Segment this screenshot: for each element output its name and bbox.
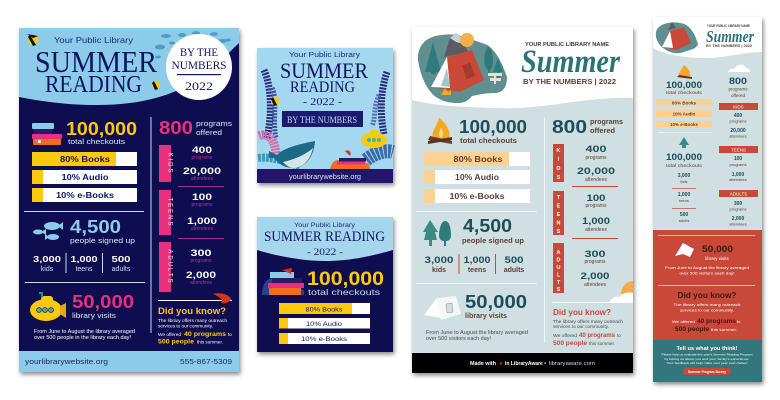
banner stat: signups: 500 — [680, 212, 688, 218]
banner kids: 20,000 — [730, 128, 746, 134]
did you know — [158, 306, 232, 346]
square footer: yourlibrarywebsite.org — [289, 174, 361, 181]
banner adults: programs — [730, 206, 746, 212]
adults stats: 300 — [190, 248, 212, 258]
checkouts stat — [307, 269, 384, 297]
banner visits caption: library visits — [705, 256, 729, 261]
banner stat: signups: teens — [679, 198, 689, 203]
icon: fish — [33, 222, 63, 240]
banner teal section: Summer Program Survey — [688, 370, 726, 374]
camping did you know: The library offers many outreach — [553, 319, 624, 324]
camping did you know: to — [617, 333, 621, 338]
camping breakdown — [424, 254, 524, 274]
camping visits note: over 500 visitors each day! — [426, 336, 491, 342]
banner background — [653, 17, 762, 382]
label: kids: K — [557, 148, 561, 154]
banner stat: signups: 3,000 — [678, 173, 690, 179]
icon: yellow fish lower — [152, 81, 160, 90]
icon: stack of books — [32, 123, 62, 145]
camping library name: YOUR PUBLIC LIBRARY NAME — [525, 42, 609, 48]
stat: visits: 50,000 — [72, 292, 134, 312]
by the numbers box: BY THE NUMBERS — [287, 116, 357, 126]
panel: checkouts square — [257, 217, 393, 352]
banner adults: 300 — [734, 201, 742, 207]
banner teal section: by letting us about you and your family's experience. — [664, 357, 750, 361]
banner bars: 80% Books — [672, 100, 696, 106]
teens stats — [187, 192, 217, 232]
camping teens stats: 1,000 — [582, 216, 610, 226]
teens stats: 1,000 — [187, 216, 217, 226]
label: adults: A — [557, 250, 561, 256]
label: kids: I — [558, 157, 560, 163]
icon: books — [330, 150, 370, 169]
label: teens: TEENS — [166, 197, 172, 228]
banner stat: checkouts: total checkouts — [666, 90, 703, 95]
stat: sign ups: 4,500 — [70, 217, 121, 237]
did you know: services to our community. — [158, 324, 213, 328]
bar: audio: 10% Audio — [306, 321, 342, 328]
camping teens stats: programs — [585, 203, 607, 209]
stat: sign ups — [70, 217, 135, 245]
banner stat: programs: programs — [728, 86, 748, 92]
icon: small fish — [271, 96, 279, 106]
banner visits stat: 50,000 — [702, 244, 733, 254]
checkouts background — [257, 217, 393, 352]
visits note: over 500 people in the library each day! — [34, 335, 131, 341]
banner bars: 10% e-Books — [670, 122, 699, 127]
banner did you know: this summer. — [711, 327, 737, 332]
label: kids — [159, 145, 172, 182]
icon: campfire — [677, 65, 692, 79]
checkouts stat: 100,000 — [307, 269, 384, 290]
camping background — [412, 27, 633, 373]
kids stats — [183, 145, 221, 182]
camping footer: libraryaware.com — [549, 361, 595, 367]
label: adults: U — [557, 265, 561, 271]
poster footer: yourlibrarywebsite.org — [25, 357, 108, 366]
banner did you know: The library offers many outreach — [674, 302, 740, 307]
panel: blue poster — [19, 28, 239, 372]
square title: summer: SUMMER — [280, 58, 368, 83]
icon: cloud — [728, 65, 750, 72]
camping stat: checkouts: total checkouts — [460, 138, 517, 145]
camping breakdown: 3,000 — [424, 255, 454, 265]
bar: e-books — [424, 189, 530, 203]
camping footer — [412, 353, 633, 373]
banner did you know: 500 people — [675, 327, 710, 333]
illustration: small tent scene — [656, 22, 698, 53]
camping title: Summer — [521, 44, 621, 80]
banner kids: programs — [730, 118, 746, 124]
label: teens — [553, 191, 564, 235]
camping stat: sign ups: people signed up — [462, 238, 524, 245]
camping adults stats — [580, 249, 610, 288]
teens stats: 100 — [192, 192, 212, 202]
bar: audio — [424, 170, 530, 184]
bar: e-books — [32, 188, 137, 202]
banner visits note — [665, 265, 749, 276]
bar: e-books: 10% e-Books — [301, 336, 348, 343]
camping breakdown: kids — [432, 267, 446, 274]
banner did you know: We offered — [672, 319, 695, 324]
visits note: From June to August the library averaged — [34, 329, 135, 335]
camping teens stats — [582, 193, 610, 233]
label: adults: T — [557, 280, 561, 286]
adults stats: attendees — [190, 280, 212, 286]
bar: e-books: 10% e-Books — [56, 191, 115, 200]
camping stat: checkouts: 100,000 — [459, 117, 527, 137]
poster footer — [19, 351, 239, 372]
title: reading: READING — [45, 72, 142, 98]
icon: sun and cloud — [610, 281, 633, 302]
kids stats: attendees — [191, 176, 213, 182]
breakdown: kids teens adults: adults — [112, 266, 131, 273]
banner kids: KIDS — [733, 104, 744, 110]
did you know: 500 people — [158, 338, 194, 346]
label: teens: S — [557, 229, 561, 235]
square background — [257, 48, 393, 183]
banner stat: signups: adults — [679, 218, 689, 223]
banner stat: signups: total checkouts — [666, 163, 703, 168]
banner kids: attendees — [729, 134, 747, 138]
kids stats: programs — [191, 155, 213, 161]
camping footer: Made with — [470, 361, 496, 367]
bar: audio: 10% Audio — [62, 173, 109, 182]
panel: camping poster — [412, 27, 633, 373]
camping did you know: 40 programs — [579, 333, 616, 339]
label: adults — [553, 243, 564, 293]
camping did you know: Did you know? — [553, 308, 611, 317]
badge: by the numbers: NUMBERS — [172, 58, 226, 72]
camping footer: ♥ — [499, 362, 503, 368]
illustration: tent scene — [418, 33, 507, 103]
camping stat: visits: library visits — [465, 313, 507, 320]
breakdown: kids teens adults: 3,000 — [33, 254, 61, 264]
label: adults: S — [557, 287, 561, 293]
breakdown: kids teens adults: kids — [41, 266, 54, 273]
stat: checkouts — [66, 119, 137, 146]
breakdown: kids teens adults — [33, 253, 131, 273]
icon: book tent — [675, 243, 694, 257]
banner visits note: over 500 visitors each day! — [680, 270, 734, 276]
adults stats — [186, 248, 216, 286]
camping stat: sign ups: 4,500 — [463, 216, 512, 236]
banner stat: checkouts: 100,000 — [666, 80, 702, 90]
camping kids stats: attendees — [585, 177, 607, 183]
icon: book tent — [424, 296, 461, 320]
banner subtitle: BY THE NUMBERS | 2022 — [706, 44, 752, 48]
camping breakdown: teens — [468, 267, 486, 274]
poster background — [19, 28, 239, 372]
banner teal section — [653, 340, 762, 382]
camping breakdown: 1,000 — [464, 255, 490, 265]
bar: books: 80% Books — [454, 155, 503, 164]
banner teal section: Please help us evaluate this year's Summer Reading Program — [662, 352, 753, 356]
camping kids stats: programs — [585, 155, 607, 161]
banner kids: 400 — [734, 113, 742, 119]
banner bars: 10% Audio — [673, 112, 696, 116]
banner did you know: services to our community. — [680, 308, 734, 312]
kids stats: 20,000 — [183, 166, 221, 176]
label: adults — [159, 242, 172, 292]
camping breakdown: 500 — [504, 255, 524, 265]
did you know: to — [228, 332, 232, 337]
camping did you know: We offered — [553, 333, 578, 338]
banner library name: YOUR PUBLIC LIBRARY NAME — [707, 24, 751, 28]
bar: audio — [32, 170, 137, 184]
stat: visits: library visits — [72, 313, 117, 320]
camping visits note: From June to August the library averaged — [426, 330, 528, 336]
stat: programs offered: programs — [196, 121, 233, 128]
camping adults stats: attendees — [584, 282, 606, 288]
label: kids — [553, 144, 564, 182]
school of fish — [155, 31, 231, 58]
header wave — [19, 28, 239, 105]
banner did you know: Did you know? — [678, 291, 737, 300]
banner stat: programs: 800 — [729, 76, 747, 86]
stat: checkouts: 100,000 — [66, 119, 137, 139]
bar: books — [424, 152, 530, 166]
checkouts header — [257, 217, 393, 261]
square title: reading: READING — [290, 79, 355, 96]
banner stat: signups — [666, 152, 703, 223]
label: kids: D — [557, 166, 561, 172]
breakdown: kids teens adults: teens — [75, 266, 93, 273]
camping header — [412, 27, 633, 108]
camping stat: sign ups — [462, 216, 524, 245]
label: kids: S — [557, 175, 561, 181]
did you know: 40 programs — [184, 331, 226, 338]
adults stats: programs — [190, 258, 212, 264]
camping teens stats: attendees — [585, 227, 607, 233]
banner bars — [656, 99, 712, 128]
label: teens: E — [557, 204, 561, 210]
banner adults: 2,000 — [732, 216, 744, 222]
camping did you know — [553, 308, 624, 347]
camping visits note — [426, 330, 528, 342]
did you know: Did you know? — [158, 306, 226, 316]
stat: visits — [72, 292, 134, 320]
label: adults: L — [557, 272, 561, 278]
banner stat: signups: kids — [680, 179, 688, 184]
banner teens: 100 — [734, 156, 742, 162]
banner did you know: 40 programs — [697, 319, 737, 325]
teens stats: programs — [191, 202, 213, 208]
banner teal section: Tell us what you think! — [676, 346, 738, 352]
icon: trees — [423, 220, 451, 246]
banner kids — [719, 103, 758, 138]
camping kids stats: 400 — [586, 144, 606, 154]
label: teens: N — [557, 220, 561, 226]
coral right — [366, 72, 393, 160]
camping did you know: this summer. — [589, 341, 615, 346]
icon: whale — [269, 141, 315, 168]
bar: e-books: 10% e-Books — [450, 192, 505, 201]
label: adults: ADULTS — [166, 249, 172, 285]
camping stat: programs — [552, 117, 623, 137]
banner did you know — [672, 291, 741, 333]
poster footer: 555-867-5309 — [180, 357, 232, 366]
stat: programs offered — [159, 118, 233, 138]
icon: books — [262, 268, 304, 295]
breakdown: kids teens adults: 1,000 — [70, 254, 98, 264]
banner adults: attendees — [729, 222, 747, 226]
icon: campfire — [428, 118, 452, 144]
stat: sign ups: people signed up — [70, 238, 135, 245]
did you know: We offered — [158, 332, 182, 337]
label: adults: D — [557, 258, 561, 264]
badge: by the numbers — [166, 34, 232, 100]
banner adults — [719, 190, 758, 226]
camping stat: programs: offered — [590, 128, 615, 135]
camping stat: programs: programs — [590, 119, 623, 126]
banner visits note: From June to August the library averaged — [665, 265, 749, 270]
banner title: Summer — [706, 27, 754, 46]
panel: ocean square — [257, 48, 393, 183]
banner stat: signups: 1,000 — [678, 192, 690, 198]
adults stats: 2,000 — [186, 270, 216, 280]
camping did you know: 500 people — [553, 341, 588, 347]
checkouts stat: total checkouts — [308, 288, 380, 297]
icon: submarine — [30, 292, 66, 321]
stat: programs offered: offered — [196, 130, 222, 137]
bar: books: 80% Books — [60, 155, 111, 164]
camping kids stats — [577, 144, 615, 183]
camping stat: visits: 50,000 — [465, 292, 527, 312]
banner teal section: Your feedback will help make next year even better! — [666, 361, 748, 365]
camping adults stats: programs — [584, 259, 606, 265]
bar: audio: 10% Audio — [455, 173, 499, 182]
banner teens: TEENS — [731, 148, 746, 152]
banner teens: 1,000 — [732, 172, 744, 178]
banner red section — [653, 230, 762, 340]
camping kids stats: 20,000 — [577, 166, 615, 176]
banner did you know: to — [737, 319, 741, 324]
teens stats: attendees — [191, 226, 213, 232]
banner teens: programs — [730, 162, 746, 167]
square library name: Your Public Library — [289, 52, 361, 59]
camping teens stats: 100 — [586, 193, 606, 203]
camping breakdown: adults — [504, 267, 524, 274]
visits note — [34, 329, 135, 341]
checkouts title: SUMMER READING — [264, 229, 385, 245]
did you know: this summer. — [197, 340, 223, 344]
banner stat: checkouts — [666, 80, 703, 95]
camping stat: programs: 800 — [552, 117, 587, 137]
banner adults: ADULTS — [730, 192, 747, 196]
stat: checkouts: total checkouts — [68, 139, 126, 146]
camping adults stats: 300 — [584, 249, 606, 259]
banner teens: attendees — [729, 177, 747, 182]
breakdown: kids teens adults: 500 — [112, 254, 131, 264]
banner stat: programs — [728, 76, 748, 98]
icon: shrimp — [213, 293, 231, 303]
banner header — [653, 17, 762, 58]
camping stat: checkouts — [459, 117, 527, 145]
coral left — [258, 70, 300, 166]
checkouts year: - 2022 - — [307, 247, 343, 257]
badge: by the numbers: 2022 — [185, 79, 213, 93]
kids stats: 400 — [192, 145, 212, 155]
bar: books — [32, 152, 137, 166]
banner teens — [719, 146, 758, 182]
bar: books: 80% Books — [306, 306, 343, 314]
label: kids: KIDS — [166, 152, 172, 175]
icon: yellow fish top — [27, 34, 38, 46]
icon: tree — [679, 137, 689, 148]
did you know: The library offers many outreach — [158, 318, 228, 323]
badge: by the numbers: BY THE — [180, 45, 218, 59]
camping stat: visits — [465, 292, 527, 320]
banner stat: programs: offered — [731, 93, 745, 98]
label: teens: T — [557, 195, 561, 201]
icon: submarine — [361, 130, 387, 148]
title: summer: SUMMER — [35, 44, 157, 79]
camping footer: in LibraryAware • — [505, 361, 546, 367]
panel: tall banner — [653, 17, 762, 382]
camping did you know: services to our community. — [553, 324, 609, 329]
camping subtitle: BY THE NUMBERS | 2022 — [523, 79, 616, 86]
library name: Your Public Library — [54, 36, 133, 45]
checkouts library name: Your Public Library — [294, 223, 355, 229]
square year: - 2022 - — [303, 97, 342, 108]
label: teens: E — [557, 212, 561, 218]
camping adults stats: 2,000 — [580, 271, 610, 281]
stat: programs offered: 800 — [159, 118, 193, 138]
label: teens — [159, 190, 172, 235]
banner stat: signups: 100,000 — [666, 152, 702, 162]
